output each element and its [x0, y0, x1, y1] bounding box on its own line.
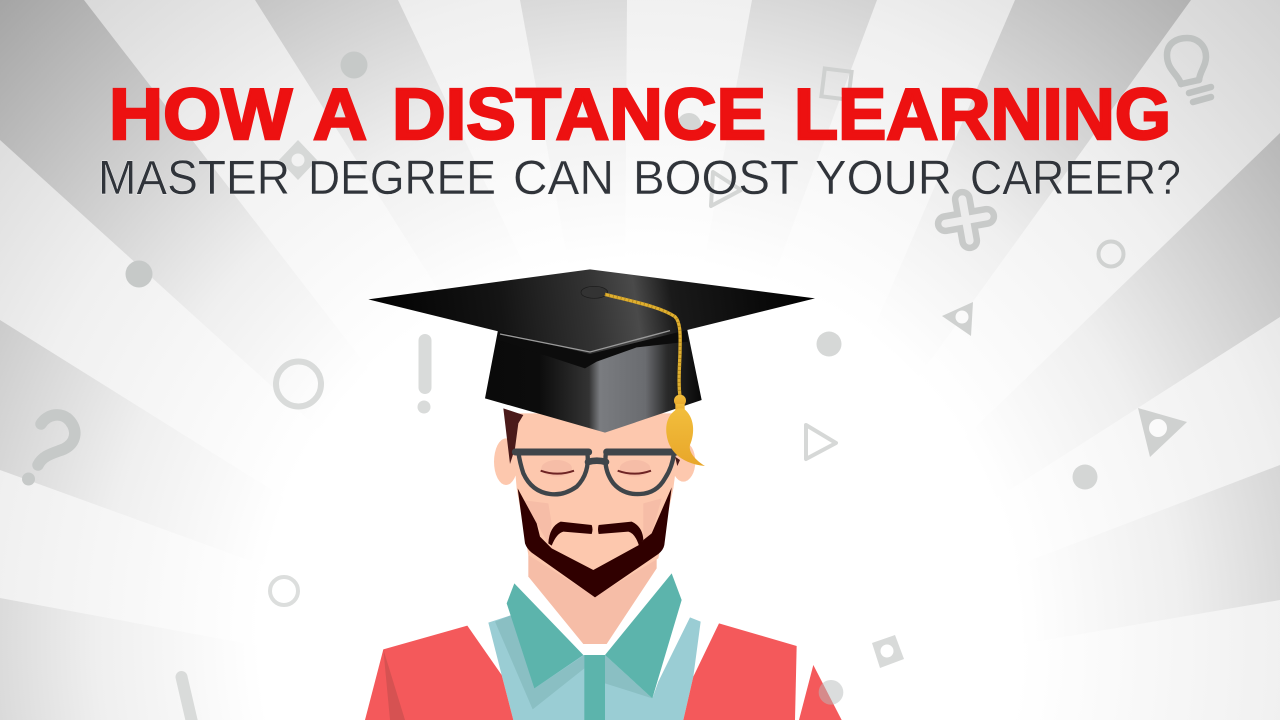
- moustache: [548, 522, 643, 546]
- graduate figure: [365, 269, 843, 720]
- title: [109, 75, 1171, 155]
- icon: exclamation mark: [418, 334, 432, 414]
- beard: [518, 487, 672, 597]
- title: DISTANCE: [392, 75, 766, 155]
- icon: dot centre right: [816, 332, 842, 356]
- vest fold shadow: [383, 649, 405, 720]
- icon: dot right: [1072, 464, 1098, 490]
- icon: plus outline: [942, 196, 990, 244]
- shirt: [488, 615, 701, 720]
- icon: triangle outline top: [711, 172, 741, 206]
- icon: ring right: [1098, 242, 1124, 266]
- icon: triangle with hole: [942, 302, 973, 336]
- icon: square outline: [821, 69, 852, 100]
- title: A: [313, 75, 367, 155]
- subtitle: [98, 152, 1181, 205]
- subtitle: CAN: [513, 152, 614, 205]
- cap body: [485, 327, 702, 433]
- vest right: [683, 623, 797, 720]
- sleeve right: [799, 665, 842, 720]
- eye shading: [541, 460, 650, 477]
- icon: ring left: [276, 362, 321, 406]
- hat button: [581, 286, 608, 298]
- icon: small ring: [270, 577, 298, 605]
- tassel cord: [605, 294, 680, 397]
- ears: [494, 438, 695, 485]
- tie: [584, 655, 605, 720]
- hair: [503, 408, 680, 466]
- title: LEARNING: [794, 75, 1171, 155]
- collar: [507, 573, 682, 698]
- icon: triangle outline: [806, 425, 836, 459]
- icon: dot behind title: [677, 113, 701, 137]
- cap band: [498, 327, 688, 368]
- neck: [528, 547, 657, 644]
- glasses and hat: [368, 269, 815, 494]
- glasses: [515, 452, 677, 494]
- icon: light bulb: [1167, 38, 1211, 102]
- face: [513, 413, 683, 597]
- icon: diamond: [279, 140, 317, 180]
- icon: large triangle with hole: [1138, 408, 1187, 457]
- cheek shadows: [522, 498, 662, 543]
- icon: exclamation bar bottom: [182, 677, 195, 720]
- board edge highlight: [500, 331, 670, 352]
- figure body and face: [365, 413, 843, 720]
- tassel: [666, 395, 705, 466]
- closed eyes: [541, 471, 651, 474]
- subtitle: MASTER: [98, 152, 290, 205]
- dot over sleeve: [819, 680, 843, 705]
- mortarboard: [368, 269, 815, 354]
- subtitle: YOUR: [815, 152, 952, 205]
- subtitle: DEGREE: [308, 152, 496, 205]
- title: HOW: [109, 75, 292, 155]
- subtitle: CAREER?: [970, 152, 1181, 205]
- icon: square with hole: [872, 635, 904, 668]
- collar shadow: [495, 615, 652, 709]
- icon: question mark: [22, 415, 75, 486]
- vest left: [365, 626, 513, 720]
- icon: dot top left: [340, 52, 368, 78]
- subtitle: BOOST: [633, 152, 799, 205]
- icon: dot left: [126, 260, 152, 288]
